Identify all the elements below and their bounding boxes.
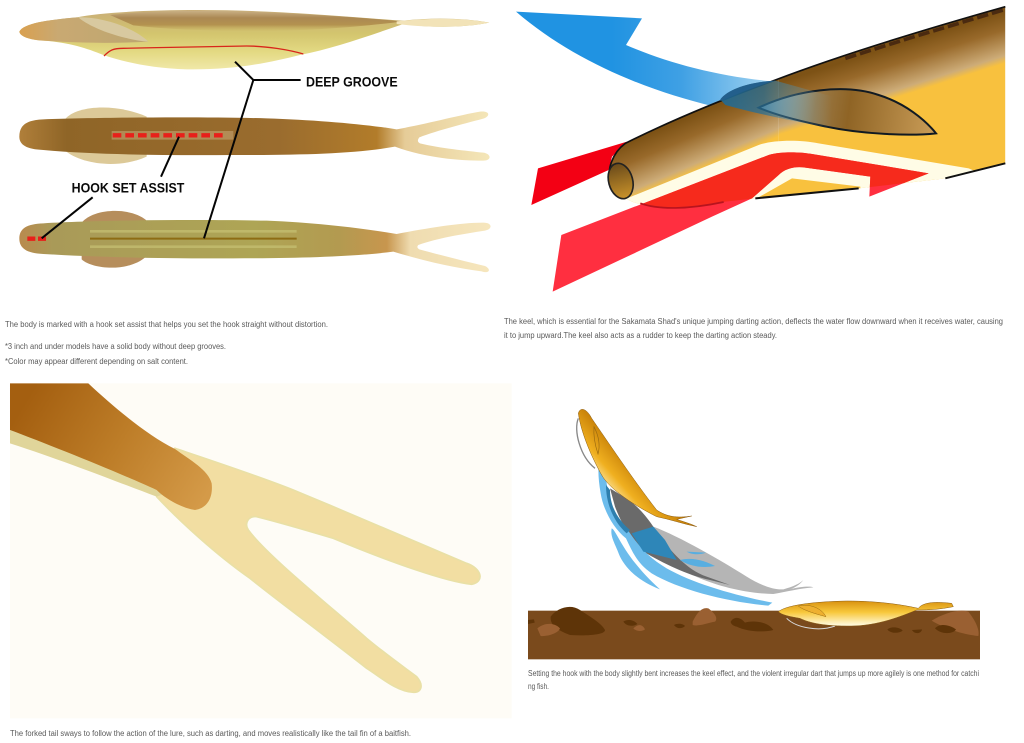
label: deep groove: DEEP GROOVE	[306, 74, 398, 90]
lure outline	[609, 7, 1005, 198]
sea floor	[528, 611, 980, 659]
red deflected flow arrow	[553, 152, 929, 292]
caption: keel	[504, 317, 1003, 340]
caption: darting action	[528, 669, 979, 691]
lure mouth	[604, 161, 637, 201]
label: hook set assist: HOOK SET ASSIST	[72, 180, 185, 196]
panel: darting action illustration	[528, 409, 980, 659]
red flow arrow tail behind lure	[531, 142, 627, 205]
caption: keel: The keel, which is essential for the Sakamata Shad's unique jumping darting action, deflects the water flow downward when it receives water, causing	[504, 317, 1003, 326]
caption: hook set assist: The body is marked with a hook set assist that helps you set the hook straight without distortion.	[5, 320, 328, 329]
caption: darting action: ng fish.	[528, 682, 549, 691]
gray afterimage of lure	[610, 488, 813, 594]
red groove line	[104, 46, 303, 56]
panel: forked tail photo	[10, 383, 512, 718]
photo background	[10, 383, 512, 718]
hook set assist dashes, top view	[113, 129, 223, 142]
lure top view	[19, 108, 490, 164]
lure belly view	[19, 211, 491, 272]
hook set assist dashes, belly view	[27, 232, 46, 245]
caption: hook set assist	[5, 320, 328, 366]
forked tail	[157, 448, 480, 692]
keel	[759, 89, 936, 135]
panel: keel water flow diagram	[516, 0, 1012, 292]
lure back dashes	[845, 9, 1005, 58]
blue inflow arrow	[516, 12, 775, 106]
lure body	[611, 6, 1006, 204]
rocks	[528, 607, 979, 636]
caption: keel: it to jump upward.The keel also acts as a rudder to keep the darting action steady.	[504, 331, 777, 340]
resting lure	[778, 601, 953, 629]
lure side view	[19, 10, 489, 69]
leader lines	[42, 62, 301, 238]
caption: forked tail: The forked tail sways to follow the action of the lure, such as darting, and moves realistically like the tail fin of a baitfish.	[10, 729, 411, 738]
tail body	[10, 383, 212, 510]
blue water streaks	[598, 457, 772, 606]
caption: hook set assist: *Color may appear different depending on salt content.	[5, 357, 188, 366]
panel: lure views with hook set assist and deep groove	[19, 10, 491, 272]
blue flow overlay on lure	[720, 81, 845, 128]
jumping lure	[577, 409, 697, 527]
caption: hook set assist: *3 inch and under models have a solid body without deep grooves.	[5, 342, 226, 351]
